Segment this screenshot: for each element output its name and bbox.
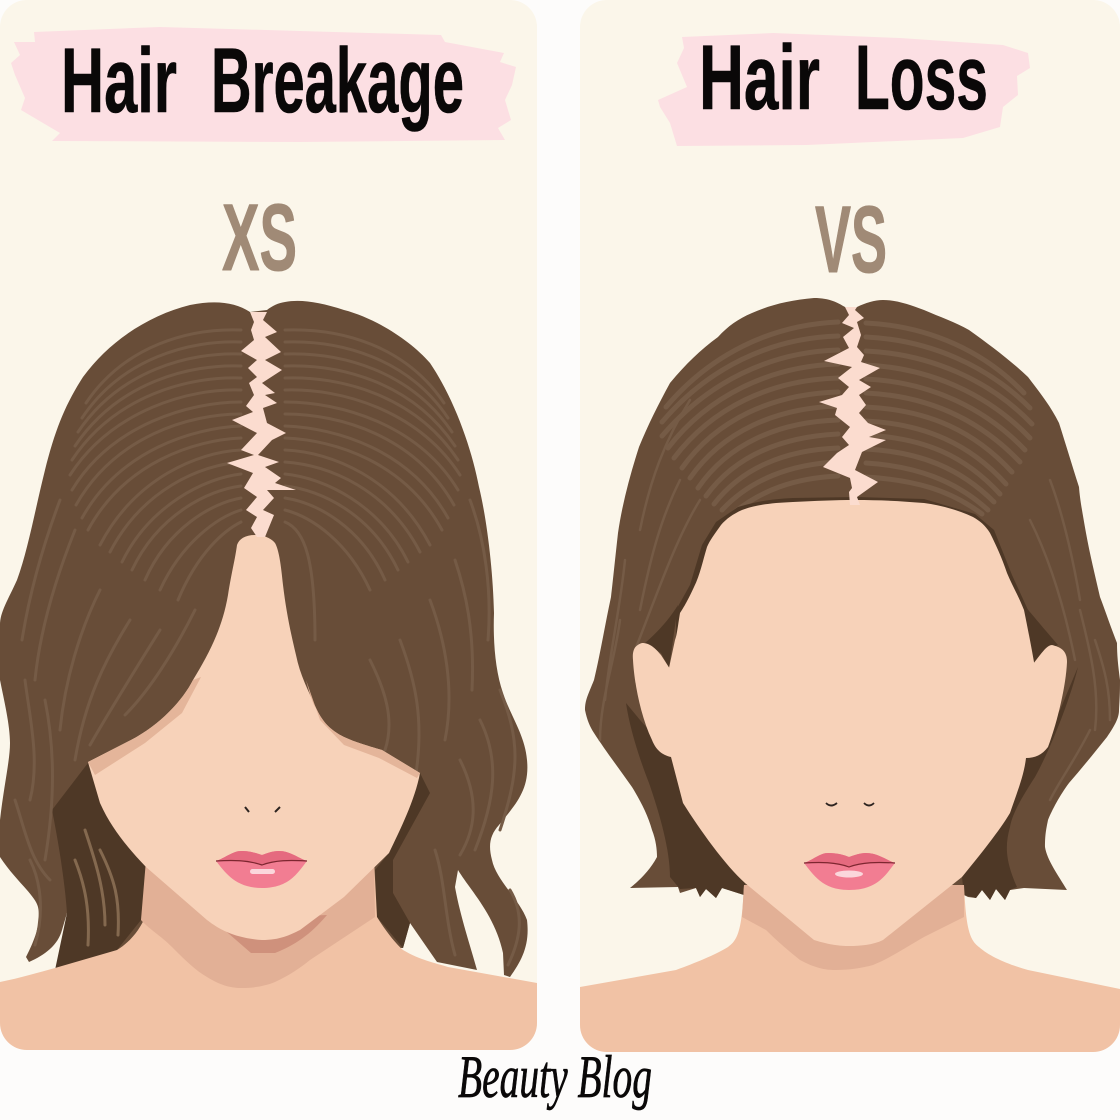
lips bbox=[216, 851, 307, 888]
dark under-layer of hair bbox=[52, 763, 146, 970]
long wavy hair bbox=[0, 301, 528, 977]
scalp part with breakage bbox=[227, 312, 296, 537]
lips bbox=[804, 853, 895, 890]
hairline shadow bbox=[676, 497, 1029, 636]
hair strands bbox=[662, 322, 1032, 516]
face bbox=[668, 500, 1035, 946]
hair strands right bbox=[285, 330, 519, 965]
nose bbox=[245, 807, 280, 812]
title: Hair Breakage bbox=[64, 45, 462, 132]
panel: hair breakage bbox=[0, 0, 537, 1050]
ears bbox=[632, 643, 671, 757]
face bbox=[88, 535, 420, 940]
footer: Beauty Blog: Beauty Blog bbox=[458, 1044, 652, 1110]
hair strands left bbox=[15, 330, 241, 945]
illustration: breakage figure bbox=[0, 301, 537, 1050]
panel: hair loss bbox=[580, 0, 1120, 1052]
shoulders and neck bbox=[580, 885, 1120, 1052]
title: Hair Breakage: Breakage bbox=[211, 30, 464, 132]
neck shadow bbox=[742, 885, 964, 970]
illustration: hair loss figure bbox=[580, 298, 1120, 1052]
neck shadow bbox=[141, 860, 375, 988]
title: Hair Loss: Loss bbox=[855, 27, 988, 129]
scalp part with loss bbox=[819, 307, 886, 505]
hair shadow on face bbox=[88, 677, 201, 775]
dark under-layers of hair bbox=[645, 605, 678, 668]
brush highlight: hair breakage title bbox=[11, 27, 516, 142]
shoulders and neck bbox=[0, 860, 537, 1050]
title: Hair Loss: Hair bbox=[699, 27, 820, 129]
chin shadow bbox=[227, 915, 327, 953]
label: XS: XS bbox=[222, 185, 297, 291]
title: Hair Breakage: Hair bbox=[61, 30, 177, 132]
label: VS: VS bbox=[815, 187, 887, 293]
nose bbox=[826, 803, 874, 806]
short hair bbox=[585, 298, 1120, 900]
title: Hair Loss bbox=[702, 42, 986, 110]
brush highlight: hair loss title bbox=[658, 33, 1030, 146]
